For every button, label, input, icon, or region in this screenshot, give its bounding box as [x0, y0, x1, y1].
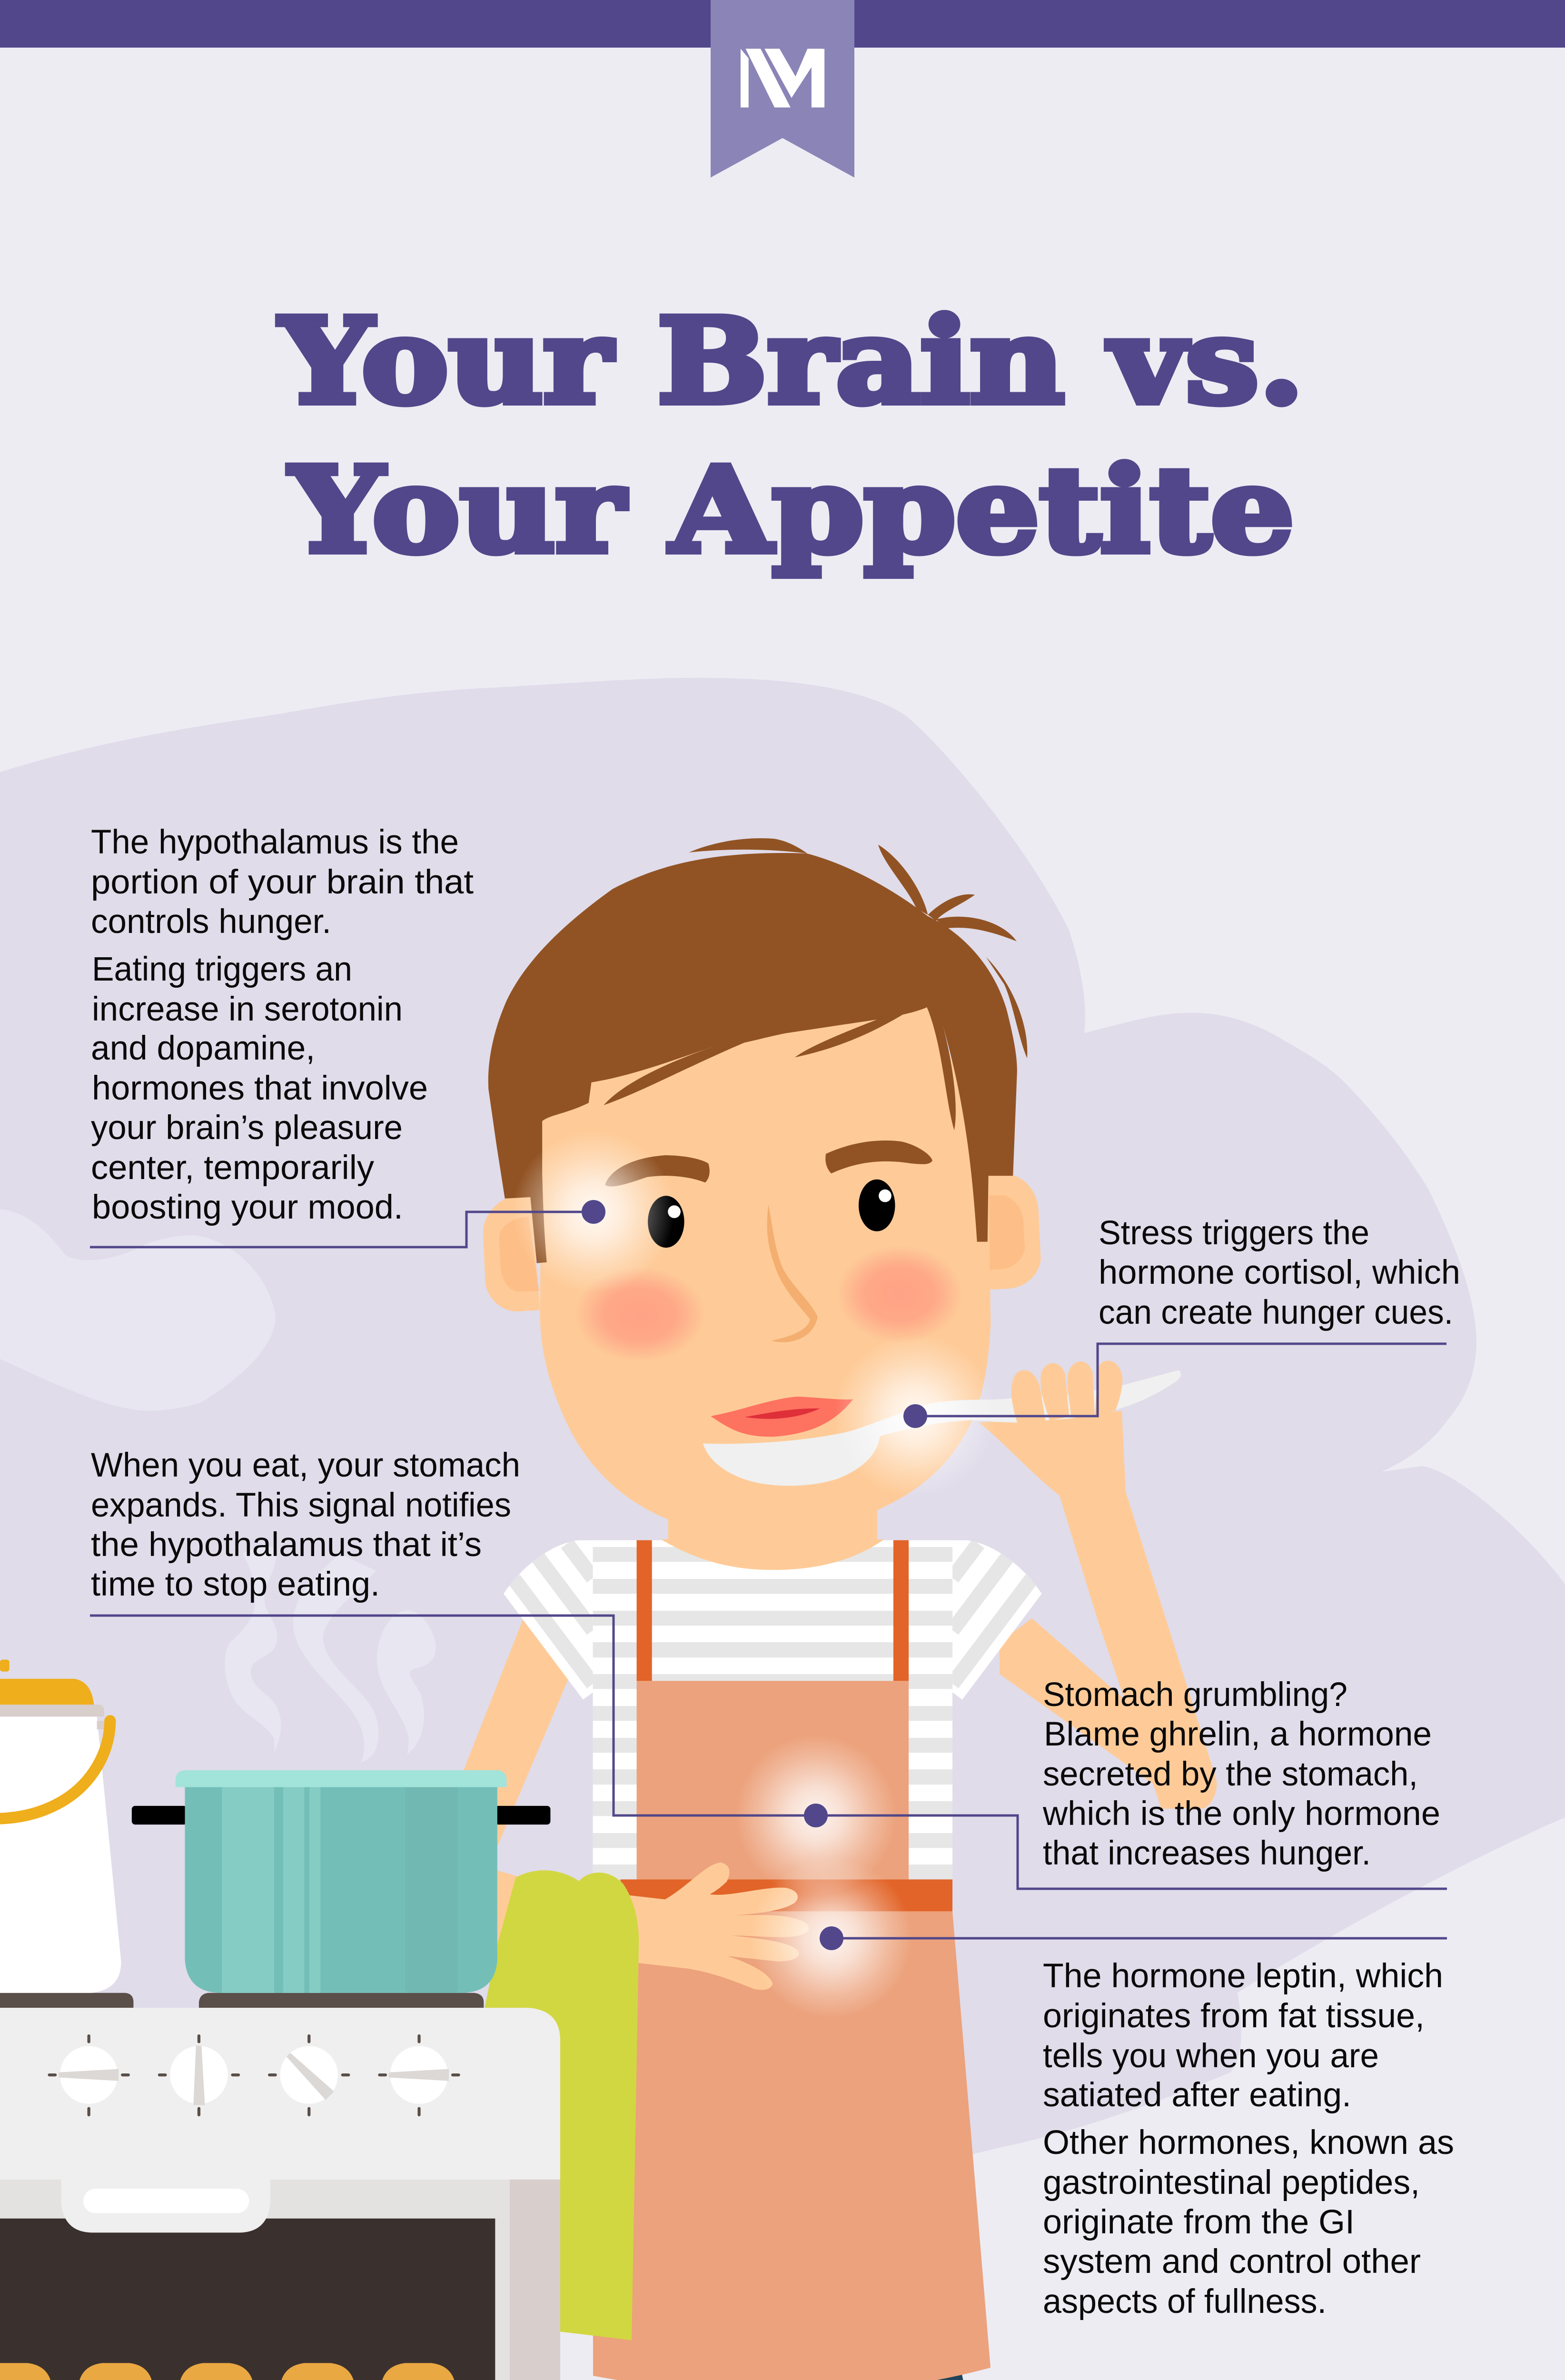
- text: cortisol: can create hunger cues.: [1099, 1294, 1453, 1331]
- text: stomach expands: the hypothalamus that it’s: [91, 1526, 482, 1564]
- text: hypothalamus: portion of your brain that: [91, 863, 474, 901]
- text: leptin: originate from the GI: [1043, 2203, 1355, 2241]
- text: ghrelin: Blame ghrelin, a hormone: [1044, 1716, 1432, 1753]
- light cloud patch: [0, 1209, 276, 1411]
- hair: [488, 838, 1027, 1263]
- ears: [483, 1175, 1041, 1311]
- apron skirt: [593, 1904, 991, 2380]
- title: Your Brain vs.: [278, 293, 1304, 430]
- text: hypothalamus: [91, 823, 474, 1226]
- leader line: stomach left: [90, 1616, 816, 1815]
- text: hypothalamus: your brain’s pleasure: [91, 1109, 403, 1147]
- text: ghrelin: which is the only hormone: [1042, 1795, 1440, 1833]
- text: cortisol: hormone cortisol, which: [1099, 1254, 1460, 1291]
- text: hypothalamus: hormones that involve: [92, 1070, 428, 1107]
- leader line: mouth: [915, 1344, 1446, 1416]
- eyes: [648, 1180, 895, 1248]
- text: stomach expands: expands. This signal notifies: [91, 1487, 511, 1524]
- text: leptin: originates from fat tissue,: [1043, 1997, 1425, 2035]
- waistband: [621, 1879, 952, 1911]
- eyebrows: [605, 1140, 932, 1187]
- face: [540, 992, 991, 1519]
- text: leptin: The hormone leptin, which: [1043, 1957, 1443, 1995]
- NM logo: [741, 49, 824, 108]
- text: stomach expands: [91, 1447, 520, 1603]
- apron straps: [637, 1540, 909, 1681]
- glow: eye: [513, 1131, 674, 1293]
- text: leptin: system and control other: [1043, 2243, 1421, 2281]
- stove control panel: [0, 2008, 560, 2180]
- right arm with hand holding spoon: [979, 1411, 1217, 1810]
- text: leptin: gastrointestinal peptides,: [1043, 2164, 1420, 2202]
- leader line: eye: [90, 1212, 594, 1247]
- title: [278, 293, 1304, 579]
- knob 2: [159, 2036, 238, 2115]
- trouser legs: [683, 2363, 1003, 2380]
- dot: belly: [820, 1926, 843, 1950]
- text: cortisol: [1099, 1214, 1460, 1331]
- knob 1: [50, 2036, 129, 2115]
- glow: stomach: [735, 1735, 897, 1896]
- hand fingers and spoon tip: [991, 1361, 1181, 1423]
- oven knobs: [50, 2036, 459, 2115]
- text: hypothalamus: controls hunger.: [91, 903, 331, 941]
- leader line: stomach right: [816, 1815, 1447, 1889]
- dot: eye: [582, 1200, 605, 1224]
- left sleeve: [504, 1540, 593, 1699]
- oven handle: [61, 2180, 270, 2232]
- apron: [593, 1540, 991, 2380]
- knob 3: [269, 2036, 348, 2115]
- apron bib: [637, 1681, 909, 1879]
- cheeks: [574, 1267, 706, 1362]
- glow: mouth: [834, 1335, 996, 1497]
- head: [483, 838, 1041, 1519]
- kettle: [0, 1660, 121, 1993]
- text: cortisol: Stress triggers the: [1099, 1214, 1369, 1252]
- lips: [711, 1397, 853, 1437]
- text: leptin: tells you when you are: [1043, 2037, 1379, 2075]
- nose: [767, 1204, 818, 1342]
- background blob: [0, 678, 1565, 2237]
- left arm: [425, 1620, 568, 1958]
- bread rolls: [0, 2363, 456, 2380]
- text: ghrelin: that increases hunger.: [1043, 1835, 1371, 1872]
- text: stomach expands: time to stop eating.: [91, 1566, 380, 1603]
- character: [425, 838, 1217, 2380]
- text: hypothalamus: and dopamine,: [91, 1030, 315, 1067]
- text: hypothalamus: increase in serotonin: [92, 991, 403, 1028]
- dot: mouth: [903, 1404, 927, 1428]
- dot: stomach: [804, 1804, 828, 1827]
- pot: [132, 1770, 550, 1993]
- text: ghrelin: secreted by the stomach,: [1043, 1755, 1418, 1793]
- stove: [0, 1993, 560, 2380]
- title: Your Appetite: [288, 442, 1294, 579]
- glow: belly: [751, 1857, 912, 2019]
- neck: [661, 1450, 884, 1570]
- text: hypothalamus: The hypothalamus is the: [91, 823, 459, 861]
- stove lower body: [0, 2178, 560, 2380]
- striped shirt: [476, 1518, 1070, 1879]
- text: leptin: satiated after eating.: [1043, 2076, 1351, 2114]
- spoon: [703, 1399, 1020, 1486]
- oven window with trays: [0, 2219, 495, 2380]
- text: hypothalamus: Eating triggers an: [92, 951, 352, 988]
- text: stomach expands: When you eat, your stomach: [91, 1447, 520, 1484]
- burners: [0, 1993, 484, 2008]
- hand on stomach: [621, 1863, 809, 1990]
- ribbon with logo: [711, 0, 854, 178]
- text: leptin: [1043, 1957, 1454, 2320]
- text: ghrelin: Stomach grumbling?: [1043, 1676, 1347, 1714]
- leader line: belly: [832, 1937, 1447, 1939]
- knob 4: [379, 2036, 459, 2115]
- text: leptin: aspects of fullness.: [1043, 2283, 1327, 2320]
- right sleeve: [952, 1540, 1041, 1699]
- text: hypothalamus: center, temporarily: [91, 1149, 374, 1187]
- trousers: [570, 2363, 1201, 2380]
- text: ghrelin: [1042, 1676, 1440, 1872]
- top bar: [0, 0, 1565, 48]
- text: leptin: Other hormones, known as: [1043, 2124, 1454, 2162]
- steam wisps: [225, 1546, 436, 1762]
- text: hypothalamus: boosting your mood.: [92, 1189, 403, 1226]
- towel: [467, 1870, 639, 2340]
